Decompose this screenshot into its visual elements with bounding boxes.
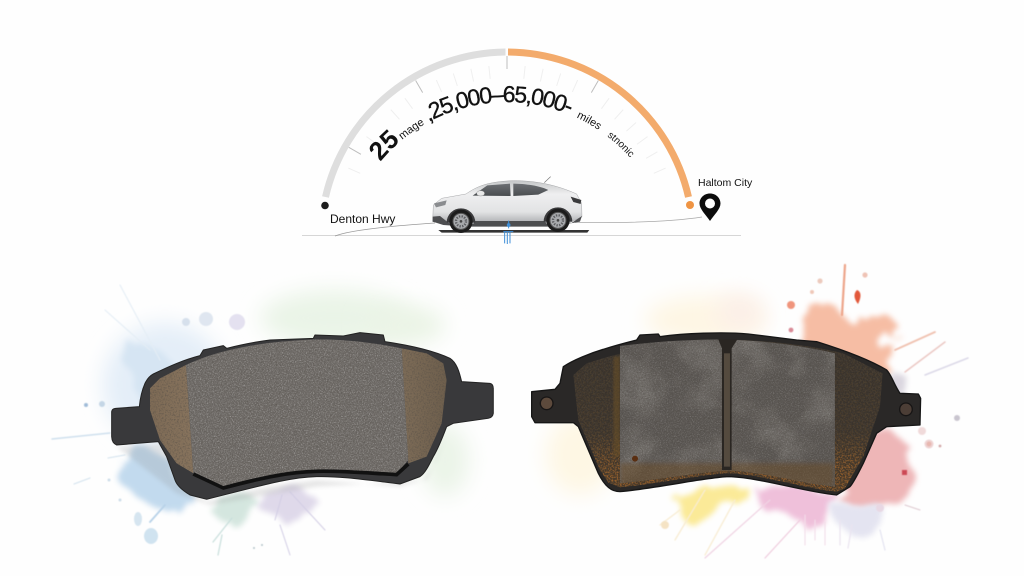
rear wheel — [546, 209, 570, 232]
curved mileage label — [370, 86, 634, 162]
rust spot — [632, 456, 638, 462]
gauge grey segment — [326, 52, 506, 197]
mirror — [477, 191, 485, 196]
worn grey friction surface — [618, 337, 837, 490]
car illustration — [433, 177, 589, 244]
new brake pad — [112, 333, 493, 505]
icon: location pin — [700, 194, 720, 221]
watercolor splash behind worn pad — [546, 265, 968, 558]
pad shadow — [117, 433, 447, 505]
rusty friction ring — [570, 337, 887, 493]
taillight — [571, 197, 581, 204]
infographic canvas — [51, 48, 969, 559]
lower sill — [433, 216, 582, 227]
friction surface — [183, 337, 413, 490]
curved mileage label: stnonic — [608, 132, 634, 157]
antenna — [544, 177, 551, 183]
car shadow — [438, 230, 589, 233]
arc path for curved label — [365, 102, 649, 184]
headlight — [434, 200, 447, 207]
gauge: mileage arc — [321, 52, 694, 209]
watercolor splash behind new pad — [52, 285, 469, 555]
curved mileage label: miles — [577, 112, 601, 130]
car body — [433, 181, 582, 225]
gauge tick marks — [348, 56, 666, 173]
gauge orange segment — [508, 52, 688, 197]
right rivet — [900, 403, 912, 416]
worn brake pad — [532, 333, 921, 495]
icon: blue marker — [503, 221, 513, 244]
left rivet — [540, 397, 553, 410]
gauge end dot — [686, 201, 694, 209]
pad backing plate — [532, 333, 921, 495]
wheel arches — [447, 207, 572, 223]
curved mileage label: ,25,000–65,000- — [428, 86, 572, 124]
curved mileage label: mage — [399, 120, 424, 140]
windows — [473, 184, 548, 196]
label: Haltom City: Haltom City — [698, 177, 753, 189]
gauge start dot — [321, 202, 329, 209]
label: Denton Hwy: Denton Hwy — [330, 212, 395, 226]
road lines — [302, 217, 741, 236]
tan edges — [147, 347, 450, 477]
centre slot — [718, 339, 737, 470]
bottom lip — [193, 464, 408, 488]
front wheel — [449, 210, 473, 233]
curved mileage label: 25 — [370, 129, 398, 162]
pad backing plate — [112, 333, 493, 499]
